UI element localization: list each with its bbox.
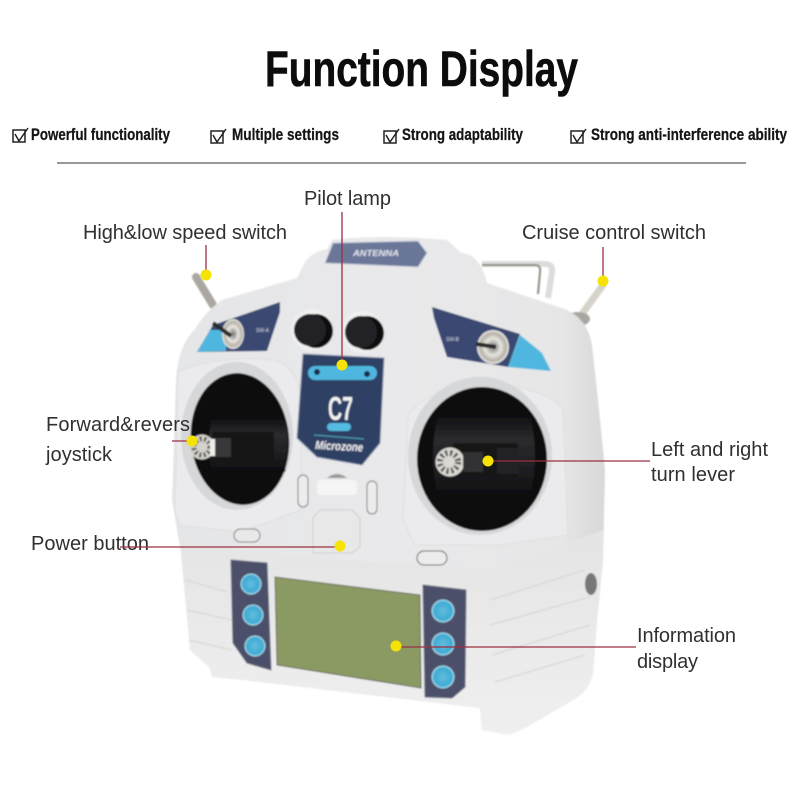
right joystick well ring [408, 377, 552, 535]
left switch panel: SW-A [256, 328, 270, 334]
lower housing [181, 530, 603, 735]
remote controller illustration [172, 237, 605, 735]
feature: powerful functionality: Powerful functionality [31, 125, 170, 144]
power button door [313, 510, 360, 553]
right switch panel [432, 307, 551, 371]
feature: multiple settings: Multiple settings [232, 125, 339, 144]
left dial frame [175, 359, 301, 532]
callout: information display: display [637, 651, 698, 673]
controller body [172, 237, 605, 735]
callout: high and low speed switch [83, 222, 287, 280]
callout: forward and reverse joystick: joystick [45, 444, 113, 466]
side port [585, 573, 597, 595]
right joystick assembly [433, 415, 535, 497]
left button panel [231, 560, 271, 670]
right trim slider [417, 551, 447, 565]
right switch panel: SW-B [446, 337, 460, 343]
left trim slider [234, 529, 260, 542]
callout: information display: Information [637, 625, 736, 647]
LCD screen [275, 577, 421, 688]
callout: forward and reverse joystick: Forward&revers [46, 414, 190, 436]
right joystick well [417, 387, 547, 531]
left toggle lever [196, 277, 213, 305]
callout: high and low speed switch: High&low speed switch [83, 222, 287, 244]
callout: cruise control switch [522, 222, 706, 286]
feature: strong adaptability: Strong adaptability [402, 125, 523, 144]
right dial frame [403, 385, 568, 545]
feature: multiple settings [211, 125, 339, 144]
callout: power button: Power button [31, 533, 149, 555]
left joystick well [184, 368, 296, 510]
knob: right [342, 311, 384, 353]
lower housing grip ribs [185, 570, 590, 682]
callout: left and right turn lever: turn lever [651, 464, 735, 486]
callout: left and right turn lever [482, 439, 768, 486]
center latch and side sliders [298, 474, 377, 514]
callout: information display [390, 625, 736, 673]
callout: left and right turn lever: Left and right [651, 439, 768, 461]
callout: pilot lamp: Pilot lamp [304, 188, 391, 210]
left joystick well ring [181, 362, 293, 510]
center badge panel: C7 [328, 390, 353, 427]
carry handle [482, 264, 552, 298]
center badge panel [297, 354, 384, 465]
callout: power button [31, 533, 346, 555]
knob: left [291, 309, 333, 351]
callout: forward and reverse joystick [45, 414, 198, 466]
right toggle lever [566, 285, 603, 326]
feature list [13, 125, 787, 144]
callout: cruise control switch: Cruise control switch [522, 222, 706, 244]
left joystick assembly [190, 418, 288, 472]
right button panel [423, 585, 466, 698]
left switch panel [197, 302, 280, 352]
title: Function Display [265, 41, 578, 97]
callout: pilot lamp [304, 188, 391, 370]
center badge panel: Microzone [315, 438, 364, 455]
antenna plate [325, 241, 427, 267]
antenna plate: ANTENNA [352, 248, 399, 258]
